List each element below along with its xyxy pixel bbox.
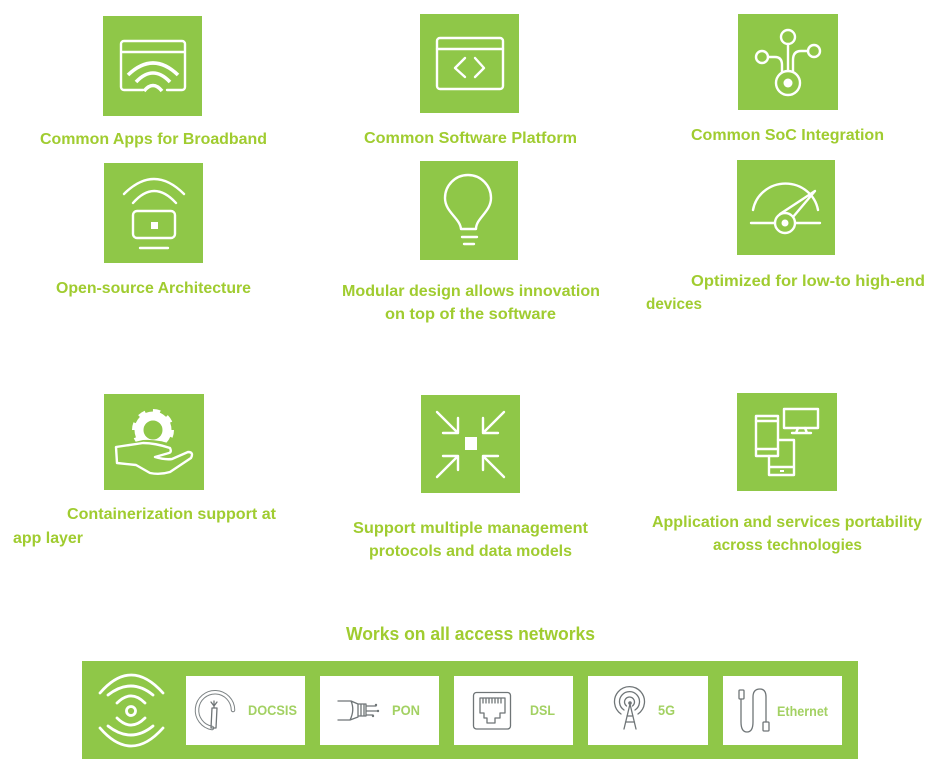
icon: converging arrows	[421, 395, 520, 493]
panel: optimized for devices: devices	[646, 296, 702, 313]
panel: containerization: app layer	[13, 530, 83, 547]
icon: coaxial cable	[197, 692, 233, 728]
panel: management protocols: protocols and data models	[369, 543, 572, 560]
label: software platform: Common Software Platform	[364, 130, 577, 147]
panel: optimized for devices	[646, 160, 925, 313]
label: pon: PON	[392, 702, 420, 718]
label: open-source: Open-source Architecture	[56, 280, 251, 297]
icon: ethernet cable	[739, 689, 769, 732]
panel: application portability	[652, 393, 922, 554]
icon: code window	[420, 14, 519, 113]
panel: common apps for broadband	[40, 16, 267, 148]
icon: light bulb	[420, 161, 518, 260]
panel: modular design: on top of the software	[385, 306, 556, 323]
panel: containerization	[13, 394, 277, 547]
panel: common soc integration	[691, 14, 884, 144]
network: dsl	[454, 676, 573, 745]
icon: soc nodes	[738, 14, 838, 110]
network: docsis	[186, 676, 305, 745]
icon: screens and devices	[737, 393, 837, 491]
label: ethernet: Ethernet	[777, 703, 828, 719]
panel: open-source architecture	[56, 163, 251, 297]
icon: speed gauge	[737, 160, 835, 255]
label: portability: Application and services portability	[652, 514, 922, 531]
panel: management protocols	[353, 395, 589, 560]
icon: fiber cable	[338, 701, 379, 720]
panel: modular design	[342, 161, 600, 323]
label: soc integration: Common SoC Integration	[691, 127, 884, 144]
icon: hand with gear	[104, 394, 204, 490]
icon: window with wifi	[103, 16, 202, 116]
banner background	[82, 661, 858, 759]
network: ethernet	[723, 676, 842, 745]
icon: broadcast device	[104, 163, 203, 263]
heading: access networks: Works on all access networks	[346, 624, 595, 644]
label: management protocols: Support multiple management	[353, 520, 589, 537]
panel: common software platform	[364, 14, 577, 147]
network: pon	[320, 676, 439, 745]
icon: ethernet jack	[474, 692, 510, 729]
label: 5g: 5G	[658, 702, 675, 718]
icon: antenna tower	[614, 687, 644, 729]
label: docsis: DOCSIS	[248, 702, 297, 718]
panel: application portability: across technologies	[713, 537, 862, 554]
icon: signal rings	[100, 675, 163, 746]
label: dsl: DSL	[530, 702, 555, 718]
label: containerization: Containerization support at	[67, 506, 277, 523]
label: optimized: Optimized for low-to high-end	[691, 273, 925, 290]
network: 5g	[588, 676, 708, 745]
label: modular design: Modular design allows innovation	[342, 283, 600, 300]
panel: access networks banner	[82, 661, 858, 759]
label: common apps: Common Apps for Broadband	[40, 131, 267, 148]
